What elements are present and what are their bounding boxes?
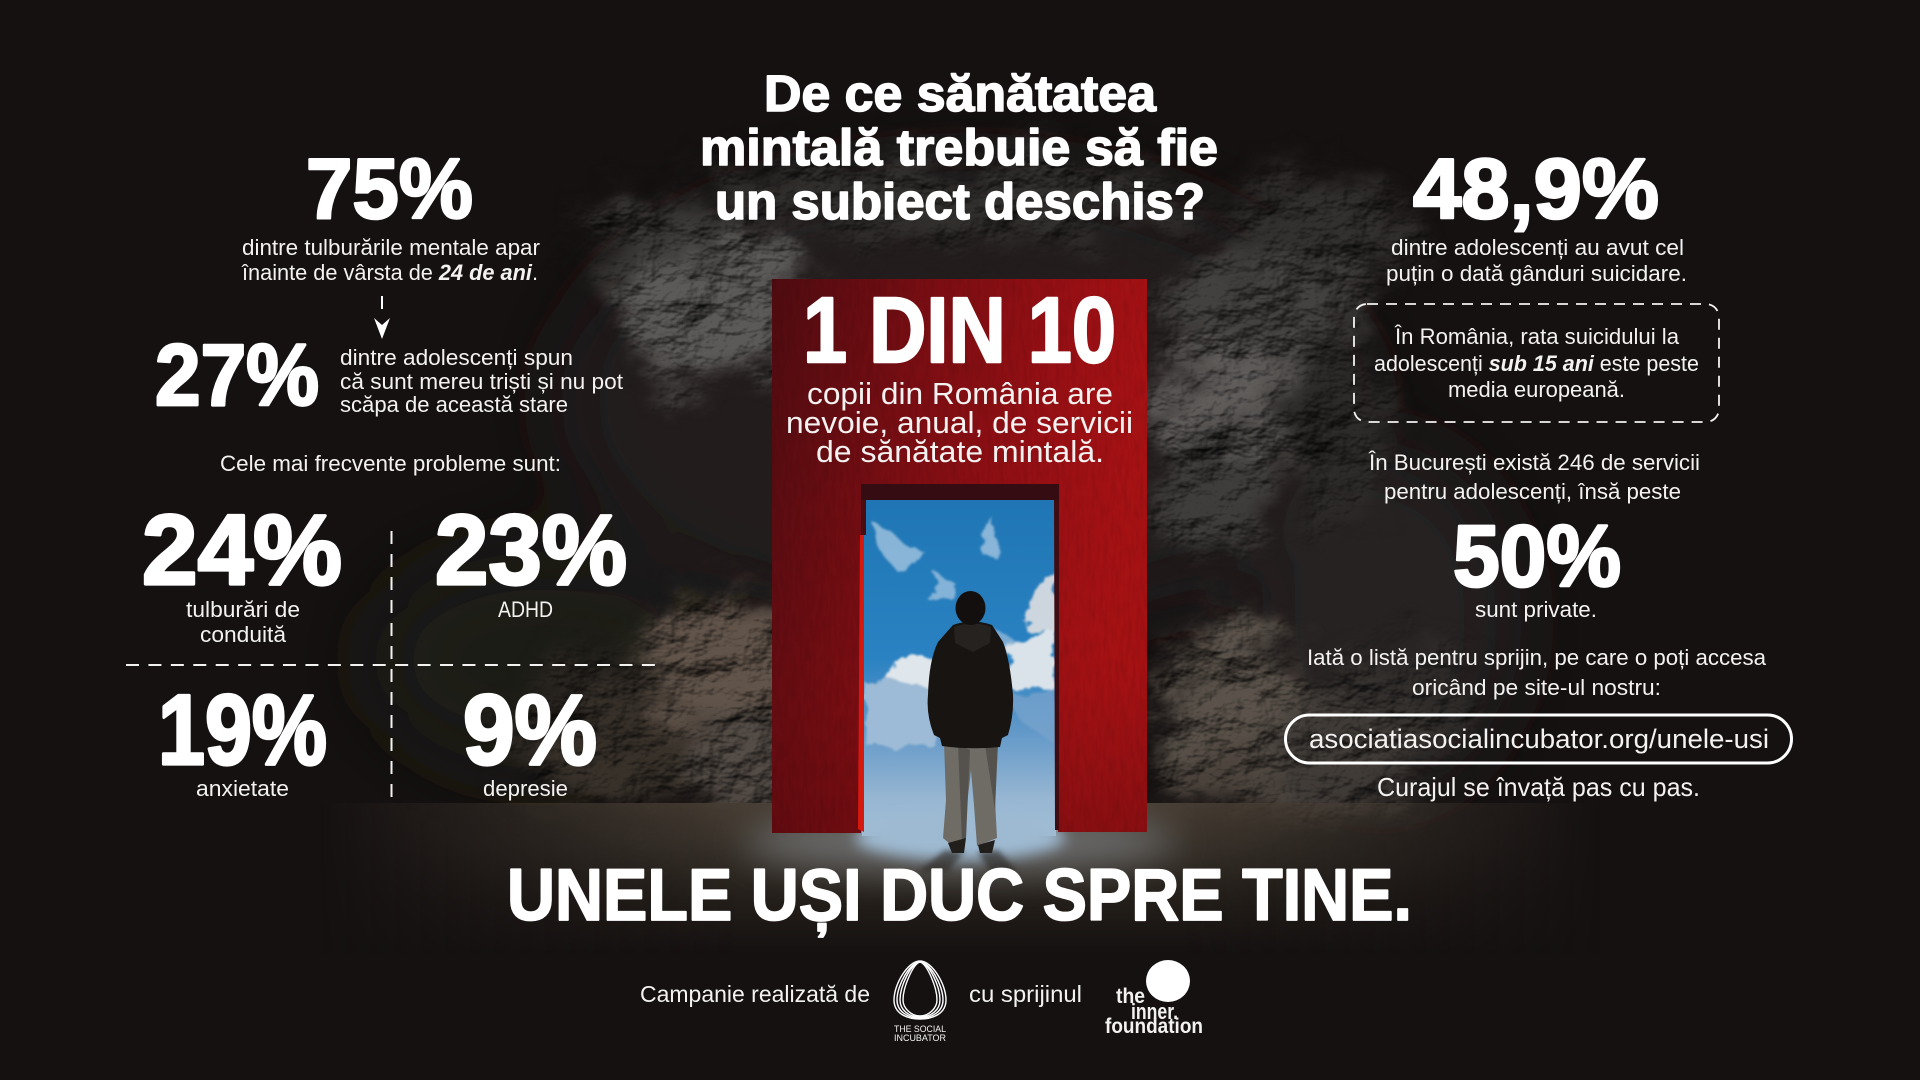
- logo: the inner foundation: [1105, 960, 1203, 1038]
- stat: 75%: [241, 142, 540, 285]
- headline: UNELE UȘI DUC SPRE TINE.: [507, 855, 1412, 937]
- stat: 75%: dintre tulburările mentale apar: [242, 235, 540, 260]
- url pill: [1286, 715, 1792, 763]
- text: support list: oricând pe site-ul nostru:: [1412, 675, 1661, 700]
- stat: 48,9%: [1386, 142, 1687, 286]
- url pill: asociatiasocialincubator.org/unele-usi: [1309, 724, 1769, 754]
- logo: the social incubator: [894, 961, 946, 1044]
- text: support list: [1307, 645, 1766, 700]
- stat: 75%: 75%: [306, 142, 473, 237]
- subheading: frequent problems: Cele mai frecvente probleme sunt:: [220, 451, 561, 476]
- callout: suicide rate: În România, rata suicidului la: [1394, 324, 1680, 349]
- red door: [772, 278, 1147, 872]
- panel: right statistics: [1286, 142, 1792, 802]
- light pool: [855, 816, 1065, 860]
- stat: 48,9%: 48,9%: [1413, 142, 1659, 237]
- door text: de sănătate mintală.: [816, 434, 1104, 469]
- door opening sky: [855, 490, 1065, 860]
- door frame: [772, 279, 1147, 833]
- smoke clouds: [509, 159, 1479, 829]
- stat: 48,9%: puțin o dată gânduri suicidare.: [1386, 261, 1687, 286]
- stat: 24%: tulburări de: [186, 597, 300, 622]
- door text: nevoie, anual, de servicii: [786, 405, 1133, 440]
- logo: the inner foundation: inner.: [1131, 999, 1178, 1024]
- door left inner edge: [858, 535, 864, 832]
- footer: [640, 960, 1203, 1044]
- text: Bucharest services: În București există 246 de servicii: [1368, 450, 1700, 475]
- door text: 1 DIN 10: [803, 278, 1116, 382]
- background haze: [370, 170, 1510, 790]
- stat: 27%: 27%: [155, 327, 319, 424]
- leg shadows: [918, 850, 1018, 872]
- logo: the social incubator: THE SOCIAL: [894, 1024, 946, 1035]
- head: [956, 591, 986, 625]
- panel: left statistics: [126, 142, 655, 801]
- stat: 27%: că sunt mereu triști și nu pot: [340, 369, 623, 394]
- door lintel shadow: [861, 484, 1059, 500]
- text: Bucharest services: [1368, 450, 1700, 504]
- logo: the social incubator: INCUBATOR: [894, 1033, 946, 1044]
- callout: suicide rate: adolescenți sub 15 ani este peste: [1374, 351, 1699, 376]
- title: mintală trebuie să fie: [700, 119, 1218, 176]
- stat: 23%: ADHD: [498, 597, 553, 622]
- footer text: support: cu sprijinul: [969, 981, 1082, 1007]
- title: [700, 65, 1218, 230]
- stat: 9%: 9%: [463, 674, 597, 785]
- text: Bucharest services: pentru adolescenți, însă peste: [1384, 479, 1681, 504]
- stat: 48,9%: dintre adolescenți au avut cel: [1391, 235, 1684, 260]
- footer text: campaign: Campanie realizată de: [640, 981, 870, 1007]
- logo: the inner foundation: foundation: [1105, 1015, 1203, 1038]
- figure from behind: [928, 591, 1013, 853]
- text: courage: Curajul se învață pas cu pas.: [1377, 772, 1700, 802]
- arrow: down: [374, 296, 390, 339]
- shoes: [948, 838, 995, 853]
- callout: suicide rate: media europeană.: [1448, 377, 1625, 402]
- stat: 27%: dintre adolescenți spun: [340, 345, 573, 370]
- stat: 50%: sunt private.: [1475, 597, 1597, 622]
- door right inner edge: [1054, 500, 1059, 830]
- stat: 50%: 50%: [1453, 508, 1621, 605]
- stat: 24%: 24%: [142, 494, 342, 605]
- floor: [394, 803, 1525, 922]
- stat: 19%: 19%: [158, 674, 327, 785]
- stat: 19%: anxietate: [196, 776, 289, 801]
- logo: the inner foundation: the: [1116, 985, 1145, 1008]
- door text: copii din România are: [807, 376, 1113, 411]
- title: un subiect deschis?: [715, 173, 1205, 230]
- title: De ce sănătatea: [764, 65, 1157, 122]
- legs: [943, 742, 998, 848]
- hoodie: [928, 622, 1013, 748]
- stat: 24%: conduită: [200, 622, 286, 647]
- light glow on the floor: [745, 810, 1175, 874]
- door text: [786, 278, 1133, 469]
- stat: 23%: 23%: [435, 494, 627, 605]
- stat: 75%: înainte de vârsta de 24 de ani.: [241, 260, 538, 285]
- stat: 9%: depresie: [483, 776, 568, 801]
- text: support list: Iată o listă pentru sprijin, pe care o poți accesa: [1307, 645, 1766, 670]
- stat: 27%: scăpa de această stare: [340, 392, 568, 417]
- stat: 27%: [155, 327, 623, 424]
- callout: suicide rate: [1354, 304, 1719, 422]
